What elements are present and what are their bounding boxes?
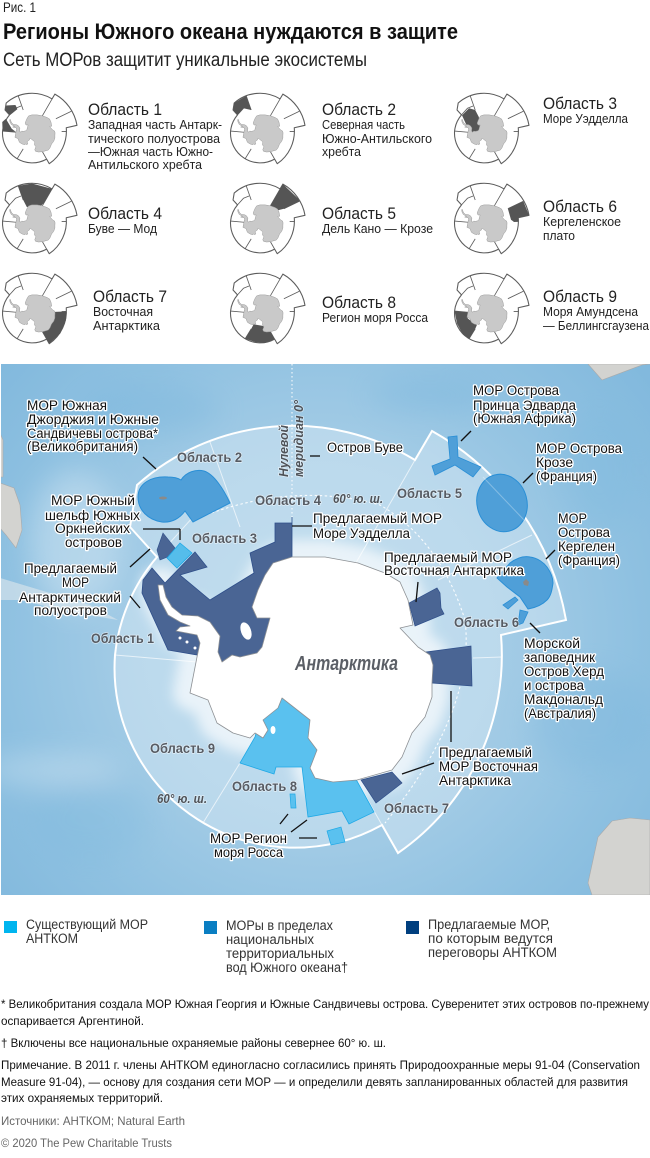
label: Crozet MPA (536, 441, 622, 484)
label: proposed Antarctic Peninsula MPA: полуостров (34, 603, 107, 618)
MPA: South Georgia and South Sandwich Islands (138, 470, 230, 522)
land: Africa (588, 364, 650, 380)
label: proposed Antarctic Peninsula MPA: Предлагаемый (24, 561, 117, 576)
label: Heard and McDonald reserve: Морской (524, 636, 580, 651)
label: South Georgia MPA: (Великобритания) (27, 439, 138, 454)
area labels on map: Область 9 (150, 740, 215, 756)
label: South Georgia MPA: Сандвичевы острова* (27, 426, 159, 441)
icon: area 9 locator (455, 273, 529, 344)
label: Heard and McDonald reserve: и острова (524, 678, 584, 693)
legend: existing CCAMLR MPA: АНТКОМ (26, 931, 78, 946)
label: Bouvet Island: Остров Буве (327, 440, 403, 455)
legend: MPAs in national waters: национальных (226, 932, 314, 947)
continental shelf glow (158, 557, 433, 782)
icon: area 3 locator (455, 93, 529, 164)
label: South Orkney MPA: шельф Южных (45, 508, 140, 523)
prime meridian label: Нулевой (277, 425, 291, 477)
area 9 heading and description (543, 287, 649, 333)
prime meridian label: меридиан 0° (292, 399, 306, 477)
label: proposed Weddell Sea MPA: Предлагаемый МОР (313, 511, 442, 526)
label: Crozet MPA: Крозе (536, 455, 573, 470)
area 6 heading and description: Область 6 (543, 197, 617, 216)
label: South Orkney MPA: островов (65, 535, 122, 550)
legend: proposed MPAs: по которым ведутся (428, 931, 553, 946)
existing MPA: Ross Sea small boxes (290, 794, 345, 845)
label: South Georgia MPA (27, 398, 159, 454)
area 4 heading and description: Буве — Мод (88, 222, 158, 236)
icon: area 5 locator (231, 183, 305, 254)
legend: proposed MPAs (406, 917, 557, 960)
legend: MPAs in national waters: территориальных (226, 946, 334, 961)
latitude labels: 60° ю. ш. (333, 492, 383, 506)
legend (4, 917, 557, 975)
footnote: asterisk: оспаривается Аргентиной. (1, 1014, 144, 1028)
area 3 heading and description: Море Уэдделла (543, 112, 628, 126)
legend: existing CCAMLR MPA: Существующий МОР (26, 917, 148, 932)
icon: area 4 locator (3, 183, 77, 254)
area 9 heading and description: Область 9 (543, 287, 617, 306)
area 8 heading and description (322, 293, 428, 325)
area 1 heading and description (88, 100, 222, 172)
label: proposed East Antarctica MPA east (439, 745, 538, 788)
label: South Orkney MPA: МОР Южный (51, 493, 135, 508)
proposed MPA: East Antarctica central block (426, 646, 472, 686)
footnote: asterisk (1, 997, 649, 1028)
label: Ross Sea MPA: моря Росса (214, 845, 283, 860)
label: proposed Weddell Sea MPA (313, 511, 442, 541)
leader lines (130, 431, 555, 838)
area 6 heading and description: Кергеленское (543, 215, 621, 229)
label: South Orkney MPA: Оркнейских (55, 521, 130, 536)
label: Prince Edward MPA: Принца Эдварда (473, 398, 576, 413)
subtitle: Сеть МОРов защитит уникальные экосистемы (3, 50, 367, 71)
area 2 heading and description: Северная часть (322, 118, 405, 132)
label: Kerguelen MPA (558, 511, 620, 568)
icon: area 7 locator (3, 273, 77, 344)
area 6 heading and description (543, 197, 621, 243)
label: Kerguelen MPA: Острова (558, 525, 610, 540)
label: proposed East Antarctica MPA west: Восточная Антарктика (384, 563, 524, 578)
proposed MPA: South Orkney shelf (157, 533, 175, 560)
label: proposed Antarctic Peninsula MPA: МОР (62, 575, 89, 590)
label: Crozet MPA: МОР Острова (536, 441, 622, 456)
area 2 heading and description: хребта (322, 145, 361, 159)
latitude labels (157, 492, 383, 806)
label: Prince Edward MPA: (Южная Африка) (473, 411, 576, 426)
label: Kerguelen MPA: МОР (558, 511, 587, 526)
map of the Southern Ocean (0, 364, 650, 895)
label: proposed Antarctic Peninsula MPA: Антарктический (19, 590, 121, 605)
area 9 heading and description: Моря Амундсена (543, 305, 638, 319)
note: Примечание. В 2011 г. члены АНТКОМ единогласно согласились принять Природоохранные меры 91-04 (Conservation (1, 1058, 640, 1072)
legend: existing CCAMLR MPA (4, 917, 148, 946)
label: Kerguelen MPA: Кергелен (558, 539, 615, 554)
label: Heard and McDonald reserve: Остров Херд (524, 664, 604, 679)
label: South Georgia MPA: МОР Южная (27, 398, 107, 413)
label: proposed East Antarctica MPA west (384, 550, 524, 578)
area 5 heading and description: Область 5 (322, 204, 396, 223)
area 2 heading and description: Южно-Антильского (322, 132, 432, 146)
Antarctica label: Антарктика (294, 653, 398, 675)
area 2 heading and description: Область 2 (322, 100, 396, 119)
area 5 heading and description: Дель Кано — Крозе (322, 222, 433, 236)
area 1 heading and description: Антильского хребта (88, 158, 202, 172)
area 4 heading and description (88, 204, 162, 236)
note (1, 1058, 640, 1105)
legend: MPAs in national waters: МОРы в пределах (226, 918, 333, 933)
area labels on map: Область 8 (232, 778, 297, 794)
copyright: © 2020 The Pew Charitable Trusts (1, 1136, 172, 1150)
label: Heard and McDonald reserve: заповедник (524, 650, 595, 665)
label: proposed East Antarctica MPA east: Антарктика (439, 773, 511, 788)
legend: MPAs in national waters (204, 918, 348, 975)
sources: Источники: АНТКОМ; Natural Earth (1, 1114, 185, 1128)
label: Prince Edward MPA (473, 383, 576, 426)
label: proposed Weddell Sea MPA: Море Уэдделла (313, 526, 410, 541)
label: Ross Sea MPA: МОР Регион (210, 831, 287, 846)
management areas: white frame (115, 426, 566, 853)
area 1 heading and description: Область 1 (88, 100, 162, 119)
area labels on map: Область 7 (384, 800, 449, 816)
ice islands in the Weddell and Ross areas (178, 621, 276, 734)
note: Measure 91-04), — основу для создания сети МОР — и определили девять запланированных областей для развития (1, 1075, 628, 1089)
land: Antarctica (158, 557, 433, 782)
area 7 heading and description: Восточная (93, 305, 153, 319)
MPA: Kerguelen (497, 557, 553, 609)
area boundary lines (115, 442, 532, 825)
MPA: Prince Edward Islands (432, 436, 481, 477)
label: Heard and McDonald reserve: Макдональд (524, 692, 603, 707)
area 5 heading and description (322, 204, 433, 236)
area 7 heading and description (93, 287, 167, 333)
existing MPA: South Orkney shelf (167, 543, 192, 568)
area labels on map: Область 6 (454, 614, 519, 630)
footnote: dagger: † Включены все национальные охраняемые районы севернее 60° ю. ш. (1, 1036, 386, 1050)
area labels on map (91, 449, 519, 816)
icon: area 8 locator (231, 273, 305, 344)
label: Heard and McDonald reserve: (Австралия) (524, 706, 596, 721)
existing MPA: Ross Sea (240, 695, 374, 824)
area 6 heading and description: плато (543, 229, 575, 243)
prime meridian dotted line (292, 364, 293, 518)
management areas: lighter interior (115, 426, 566, 853)
area labels on map: Область 2 (177, 449, 242, 465)
area 1 heading and description: тического полуострова (88, 132, 220, 146)
marine reserve: Heard and McDonald Islands (503, 597, 528, 625)
area 2 heading and description (322, 100, 432, 159)
area labels on map: Область 5 (397, 485, 462, 501)
area labels on map: Область 4 (255, 492, 321, 508)
icon: area 1 locator (2, 93, 77, 164)
legend: proposed MPAs: Предлагаемые МОР, (428, 917, 550, 932)
MPA: Crozet (476, 474, 528, 532)
label: proposed Antarctic Peninsula MPA (19, 561, 121, 618)
label: South Georgia MPA: Джорджия и Южные (27, 412, 159, 427)
label: proposed East Antarctica MPA west: Предлагаемый МОР (384, 550, 512, 565)
legend: MPAs in national waters: вод Южного океана† (226, 960, 348, 975)
latitude labels: 60° ю. ш. (157, 792, 207, 806)
land: Australia (588, 818, 650, 895)
area 7 heading and description: Область 7 (93, 287, 167, 306)
land: South Shetland ice shelf (0, 578, 118, 620)
title: Регионы Южного океана нуждаются в защите (3, 19, 458, 44)
label: Ross Sea MPA (210, 831, 287, 860)
icon: area 6 locator (455, 183, 529, 254)
area 3 heading and description (543, 94, 628, 126)
legend: proposed MPAs: переговоры АНТКОМ (428, 945, 557, 960)
label: Crozet MPA: (Франция) (536, 469, 597, 484)
proposed MPA: Weddell Sea (142, 517, 292, 670)
label: proposed East Antarctica MPA east: Предлагаемый (439, 745, 532, 760)
area 8 heading and description: Регион моря Росса (322, 311, 428, 325)
label: proposed East Antarctica MPA east: МОР Восточная (439, 759, 538, 774)
area 1 heading and description: Западная часть Антарк- (88, 118, 222, 132)
label: Kerguelen MPA: (Франция) (558, 553, 620, 568)
area 4 heading and description: Область 4 (88, 204, 162, 223)
label: Heard and McDonald reserve (524, 636, 604, 721)
land: South America (0, 433, 22, 548)
label: Prince Edward MPA: МОР Острова (473, 383, 559, 398)
area labels on map: Область 1 (91, 630, 154, 646)
area 7 heading and description: Антарктика (93, 319, 160, 333)
area 3 heading and description: Область 3 (543, 94, 617, 113)
area 8 heading and description: Область 8 (322, 293, 396, 312)
prime meridian label (277, 399, 306, 477)
note: этих охраняемых территорий. (1, 1091, 163, 1105)
proposed MPA: East Antarctica west block (409, 588, 444, 626)
60S dashed parallel (193, 495, 466, 823)
proposed MPA: East Antarctica east block (361, 772, 402, 803)
label: South Orkney MPA (45, 493, 140, 550)
icon: area 2 locator (231, 93, 305, 164)
area 1 heading and description: —Южная часть Южно- (88, 145, 213, 159)
area labels on map: Область 3 (192, 530, 257, 546)
